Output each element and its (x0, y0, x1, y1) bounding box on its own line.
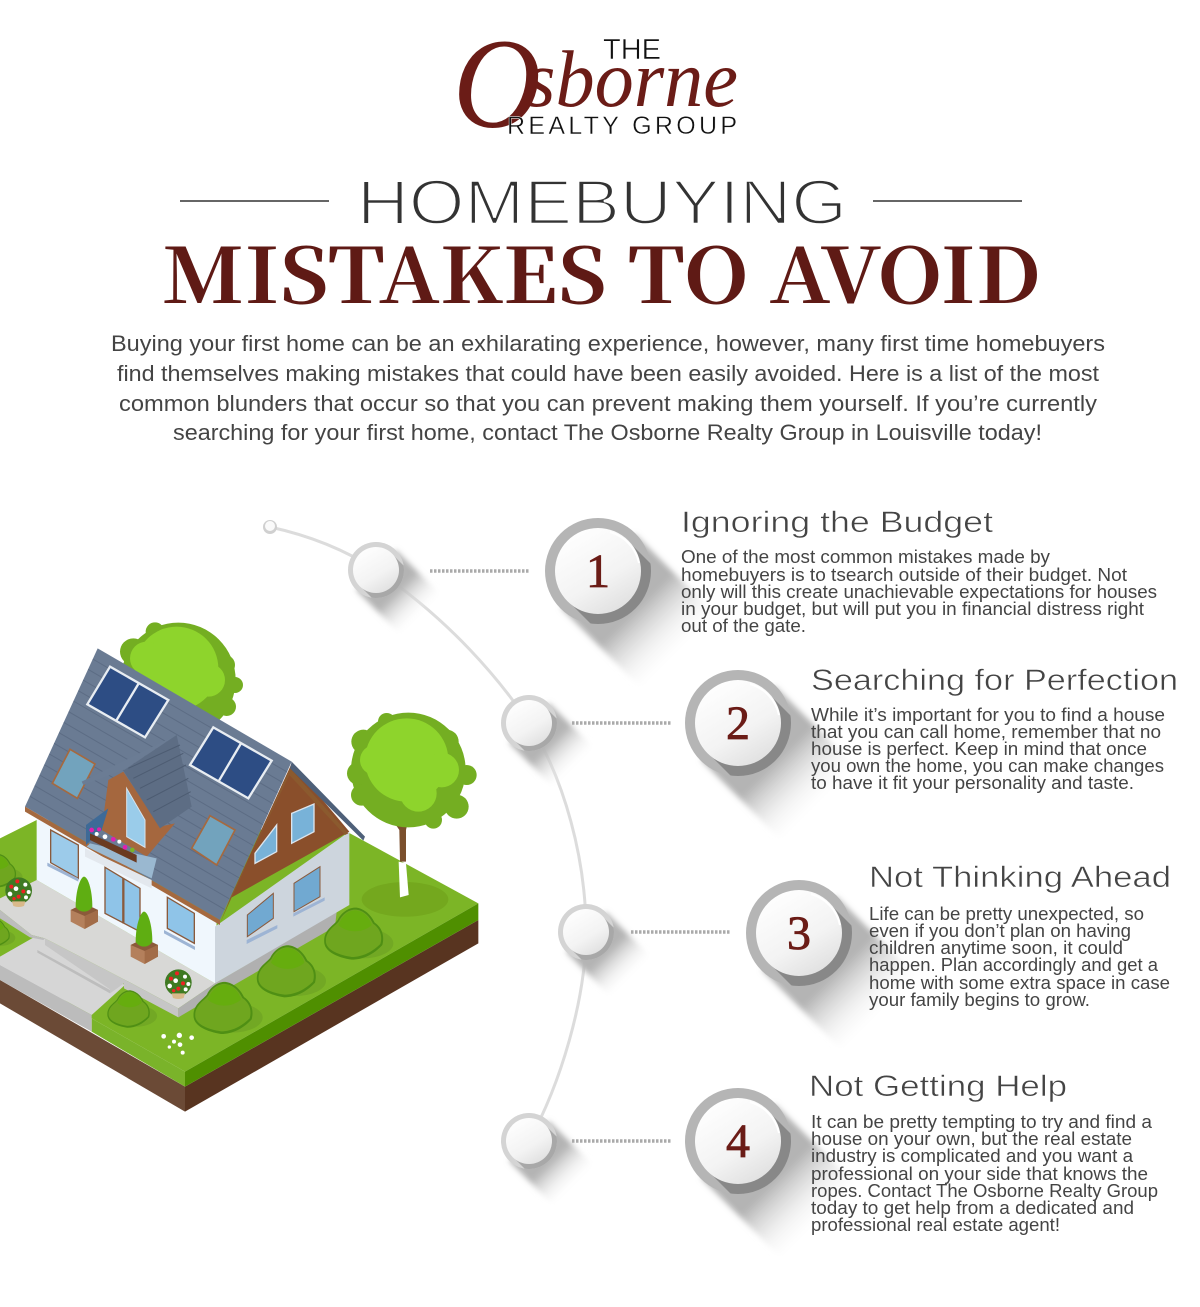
timeline node 1 (348, 542, 446, 640)
timeline start dot (263, 520, 277, 534)
logo: realty group: REALTY GROUP (507, 112, 737, 140)
timeline node 3 (558, 904, 656, 1002)
text 3: children anytime soon, it could (869, 938, 1123, 958)
heading 1: Ignoring the Budget (681, 506, 994, 539)
number badge 1 (545, 518, 718, 691)
connector 2 (572, 721, 671, 725)
connector 1 (430, 569, 529, 573)
text 1: out of the gate. (681, 616, 806, 636)
text 4: today to get help from a dedicated and (811, 1198, 1134, 1218)
text 4: It can be pretty tempting to try and find a (811, 1112, 1153, 1132)
title: homebuying: HOMEBUYING (357, 168, 847, 238)
roof windows (52, 749, 235, 865)
text 1 (681, 547, 1157, 636)
white lawn flowers (161, 1033, 194, 1055)
number badge 2 (685, 670, 858, 843)
text 4: industry is complicated and you want a (811, 1146, 1134, 1166)
text 3: even if you don’t plan on having (869, 921, 1131, 941)
title (162, 168, 1041, 325)
text 1: homebuyers is to tsearch outside of their budget. Not (681, 565, 1127, 585)
title: mistakes to avoid: MISTAKES TO AVOID (162, 216, 1041, 325)
connector 3 (631, 930, 730, 934)
shrubs (0, 854, 393, 1034)
text 1: in your budget, but will put you in financial distress right (681, 599, 1144, 619)
text 3: Life can be pretty unexpected, so (869, 904, 1144, 924)
balcony with flower box (85, 808, 157, 888)
ground floor windows (47, 830, 325, 950)
roof shingles (30, 659, 288, 910)
text 3: happen. Plan accordingly and get a (869, 955, 1159, 975)
back tree (120, 622, 243, 737)
text 2: that you can call home, remember that no (811, 722, 1161, 742)
illustration: isometric house (0, 622, 478, 1112)
house walls (37, 763, 349, 983)
dormer (82, 735, 192, 857)
timeline node 2 (501, 695, 599, 793)
roof skylights (87, 667, 272, 798)
timeline curve (270, 527, 586, 1141)
text 2: While it’s important for you to find a house (811, 705, 1165, 725)
text 4 (811, 1112, 1158, 1235)
text 3: your family begins to grow. (869, 990, 1090, 1010)
soil base (0, 920, 478, 1112)
number badge 3: 3 (787, 907, 811, 960)
panel: step 3 (558, 861, 1171, 1053)
connector 4 (572, 1139, 671, 1143)
text 2: you own the home, you can make changes (811, 756, 1164, 776)
roof (25, 648, 365, 925)
text 4: house on your own, but the real estate (811, 1129, 1132, 1149)
logo: sborne: sborne (525, 36, 738, 124)
number badge 4 (685, 1088, 858, 1261)
panel: step 1 (348, 506, 1157, 691)
intro text: find themselves making mistakes that could have been easily avoided. Here is a list of the most (117, 361, 1100, 386)
panel: step 4 (501, 1070, 1158, 1261)
intro text: searching for your first home, contact The Osborne Realty Group in Louisville today! (173, 420, 1042, 445)
panel: step 2 (501, 664, 1178, 843)
text 2: to have it fit your personality and taste. (811, 773, 1134, 793)
text 2 (811, 705, 1165, 793)
gable windows (255, 804, 314, 863)
logo: the: THE (603, 34, 661, 66)
heading 4: Not Getting Help (809, 1070, 1067, 1103)
number badge 2: 2 (726, 697, 750, 750)
grass lawn (0, 820, 478, 1087)
intro text (111, 331, 1105, 445)
logo: script O: O (453, 13, 541, 155)
text 4: professional on your side that knows the (811, 1164, 1148, 1184)
intro text: Buying your first home can be an exhilarating experience, however, many first time homebuyers (111, 331, 1105, 356)
text 1: only will this create unachievable expectations for houses (681, 582, 1157, 602)
text 2: house is perfect. Keep in mind that once (811, 739, 1147, 759)
text 1: One of the most common mistakes made by (681, 547, 1050, 567)
text 4: professional real estate agent! (811, 1215, 1060, 1235)
front walkway (0, 937, 125, 1032)
timeline node 4 (501, 1113, 599, 1211)
number badge 3 (746, 880, 919, 1053)
flower pots (5, 877, 192, 999)
intro text: common blunders that occur so that you can prevent making them yourself. If you’re currently (119, 391, 1098, 416)
number badge 4: 4 (726, 1115, 750, 1168)
text 4: ropes. Contact The Osborne Realty Group (811, 1181, 1158, 1201)
heading 2: Searching for Perfection (811, 664, 1178, 697)
text 3: home with some extra space in case (869, 973, 1170, 993)
right tree (347, 713, 477, 897)
heading 3: Not Thinking Ahead (869, 861, 1171, 894)
logo (453, 13, 738, 155)
number badge 1: 1 (586, 545, 610, 598)
potted cones (71, 877, 158, 964)
text 3 (869, 904, 1170, 1010)
terrace (0, 880, 337, 1017)
